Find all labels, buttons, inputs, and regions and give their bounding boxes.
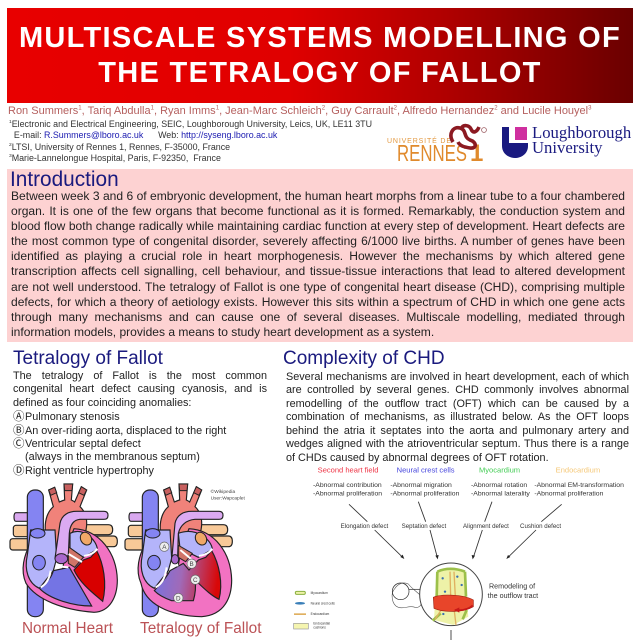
right atrium xyxy=(26,530,57,588)
logo: Universite de Rennes 1: UNIVERSITÉ DE xyxy=(387,136,451,145)
introduction text: information models, provides a means to study heart development as a system. xyxy=(11,325,434,339)
caption: tetralogy of fallot: Tetralogy of Fallot xyxy=(140,620,261,637)
marker C xyxy=(191,575,200,584)
complexity text: combination of mechanisms, as illustrated below. As the OFT loops xyxy=(286,411,629,423)
tetralogy text: The tetralogy of Fallot is the most common xyxy=(13,370,267,382)
introduction text: transcription affects cell signalling, cell behaviour, and tissue-tissue interactions that lead to altered development xyxy=(11,264,625,278)
caption: normal heart: Normal Heart xyxy=(22,620,113,637)
marker C: C xyxy=(193,577,198,584)
legend: Neural crest cells xyxy=(311,601,335,605)
remodeling label: the outflow tract xyxy=(488,592,538,600)
defect labels: Septation defect xyxy=(402,523,446,530)
logo: Loughborough University: University xyxy=(532,138,602,157)
small heart sketch xyxy=(392,583,422,608)
introduction text: through many mechanisms and can cause one of several diseases. Multiscale modelling, mediated through xyxy=(11,310,625,324)
heading: introduction: Introduction xyxy=(10,168,119,191)
mechanism: neural crest cells: -Abnormal proliferation xyxy=(390,490,460,497)
right ventricle xyxy=(39,567,92,606)
mechanism: neural crest cells xyxy=(390,465,460,497)
image credit: ©Wikipedia xyxy=(211,488,235,495)
mechanism: second heart field xyxy=(313,465,382,497)
title banner: THE TETRALOGY OF FALLOT xyxy=(98,57,542,89)
introduction text: defects, for which a theory of aetiology exists. However this sits within a spectrum of CHD in which one gene acts xyxy=(11,295,625,309)
outflow tract lens xyxy=(420,563,482,626)
affiliations: 1Electronic and Electrical Engineering, SEIC, Loughborough University, Leics, UK, LE11 3TU xyxy=(9,119,372,129)
complexity text: are controlled by several genes. CHD commonly involves abnormal xyxy=(286,384,629,396)
complexity text: wedges aligned with the atrioventricular septum. Thus there is a range xyxy=(286,438,629,450)
mechanism: second heart field: -Abnormal contribution xyxy=(313,482,382,489)
logo: Loughborough University xyxy=(502,123,631,158)
complexity text: Several mechanisms are involved in heart development, each of which xyxy=(286,370,629,382)
tetralogy text: defined as four coinciding anomalies: xyxy=(13,397,191,409)
introduction text xyxy=(11,189,625,339)
aortic root xyxy=(178,545,192,562)
logo: Loughborough University: Loughborough xyxy=(532,123,631,142)
arrows to outflow tract xyxy=(349,502,562,557)
image credit: User:Wapcaplet xyxy=(211,495,245,501)
pulmonary artery xyxy=(55,511,108,560)
affiliations: 2LTSI, University of Rennes 1, Rennes, F-35000, France xyxy=(9,142,230,152)
tetralogy text: Right ventricle hypertrophy xyxy=(25,465,154,477)
right atrium xyxy=(141,530,172,588)
legend: Endocardium xyxy=(311,612,330,616)
marker A xyxy=(160,542,169,551)
outer wall xyxy=(138,529,232,617)
mechanism: second heart field: Second heart field xyxy=(318,465,379,474)
tetralogy text: (always in the membranous septum) xyxy=(25,451,200,463)
tetralogy text: congenital heart defect causing cyanosis, and is xyxy=(13,383,267,395)
image credit xyxy=(211,488,245,501)
title banner xyxy=(7,8,633,103)
marker B xyxy=(187,559,196,568)
heading: complexity of chd: Complexity of CHD xyxy=(283,348,445,368)
tetralogy text xyxy=(13,370,267,477)
complexity text xyxy=(286,370,629,464)
defect labels: Alignment defect xyxy=(463,523,509,530)
tetralogy heart xyxy=(125,484,232,617)
introduction text: blood flow both change radically while maintaining cardiac function at every step of development. Heart defects are xyxy=(11,219,625,233)
marker D: D xyxy=(176,595,181,602)
aortic root xyxy=(68,547,83,567)
introduction text: are not well understood. The tetralogy of Fallot is one type of congenital heart disease (CHD), comprising multiple xyxy=(11,280,625,294)
authors: Ron Summers1, Tariq Abdulla1, Ryan Imms1, Jean-Marc Schleich2, Guy Carrault2, Alfredo Hernandez2 and Lucile Houyel3 xyxy=(8,105,592,117)
complexity text: behind the atria it septates into the aorta and pulmonary artery and xyxy=(286,425,629,437)
mechanism: endocardium: Endocardium xyxy=(556,465,600,474)
heading: tetralogy of fallot: Tetralogy of Fallot xyxy=(13,348,163,368)
mechanism: myocardium xyxy=(471,465,530,497)
mechanism: neural crest cells: Neural crest cells xyxy=(397,465,455,474)
outer wall xyxy=(23,529,117,612)
legend: cushions xyxy=(313,625,326,629)
introduction text: identified as playing a crucial role in heart morphogenesis. However the mechanisms by which altered gene xyxy=(11,249,625,263)
defect labels: Cushion defect xyxy=(520,523,561,530)
tetralogy text: Pulmonary stenosis xyxy=(25,411,120,423)
affiliations: E-mail: R.Summers@lboro.ac.uk Web: http://syseng.lboro.ac.uk xyxy=(14,130,277,140)
introduction text: the most common type of congenital disorder, severely affecting 6/1000 live births. A number of genes have been xyxy=(11,234,625,248)
pulmonary artery, narrowed xyxy=(172,511,223,563)
lower connector xyxy=(450,630,452,640)
introduction text: Between week 3 and 6 of embryonic development, the human heart morphs from a linear tube to a four chambered xyxy=(11,189,625,203)
mechanism: endocardium xyxy=(534,465,624,497)
left atrium xyxy=(70,532,97,557)
mechanism: endocardium: -Abnormal proliferation xyxy=(534,490,604,497)
introduction text: organ. It is one of the few organs that become functional as it is formed. Remarkably, the conduction system and xyxy=(11,204,625,218)
defect labels: Elongation defect xyxy=(341,523,389,530)
mechanism: endocardium: -Abnormal EM-transformation xyxy=(534,482,624,489)
defect labels xyxy=(341,523,561,530)
mechanism: second heart field: -Abnormal proliferation xyxy=(313,490,382,497)
legend: Endocardial xyxy=(313,621,330,625)
legend: Myocardium xyxy=(311,591,328,595)
complexity text: remodelling of the outflow tract (OFT) which can be caused by a xyxy=(286,398,629,410)
mechanism: myocardium: -Abnormal rotation xyxy=(471,482,527,489)
outflow tract diagram xyxy=(293,465,624,640)
affiliations xyxy=(9,119,372,163)
panel: introduction xyxy=(7,169,633,342)
heart illustrations xyxy=(9,483,245,618)
marker A: A xyxy=(162,544,167,551)
mechanism: myocardium: -Abnormal laterality xyxy=(471,490,530,497)
legend xyxy=(294,591,335,629)
marker B: B xyxy=(190,561,194,568)
marker D xyxy=(174,593,183,603)
arrowheads xyxy=(400,555,510,559)
tetralogy text: An over-riding aorta, displaced to the right xyxy=(25,425,226,437)
complexity text: of CHDs caused by abnormal degrees of OFT rotation. xyxy=(286,452,549,464)
title banner: MULTISCALE SYSTEMS MODELLING OF xyxy=(19,22,621,54)
logo: Universite de Rennes 1 xyxy=(387,124,487,164)
mechanism: myocardium: Myocardium xyxy=(479,465,520,474)
affiliations: 3Marie-Lannelongue Hospital, Paris, F-92350, France xyxy=(9,153,221,163)
remodeling label: Remodeling of xyxy=(489,583,535,591)
normal heart xyxy=(10,484,117,617)
tetralogy text: Ventricular septal defect xyxy=(25,438,141,450)
left atrium xyxy=(178,532,212,557)
mechanism: neural crest cells: -Abnormal migration xyxy=(390,482,452,489)
left ventricle xyxy=(74,551,105,601)
shared ventricle with septal defect xyxy=(154,551,221,601)
